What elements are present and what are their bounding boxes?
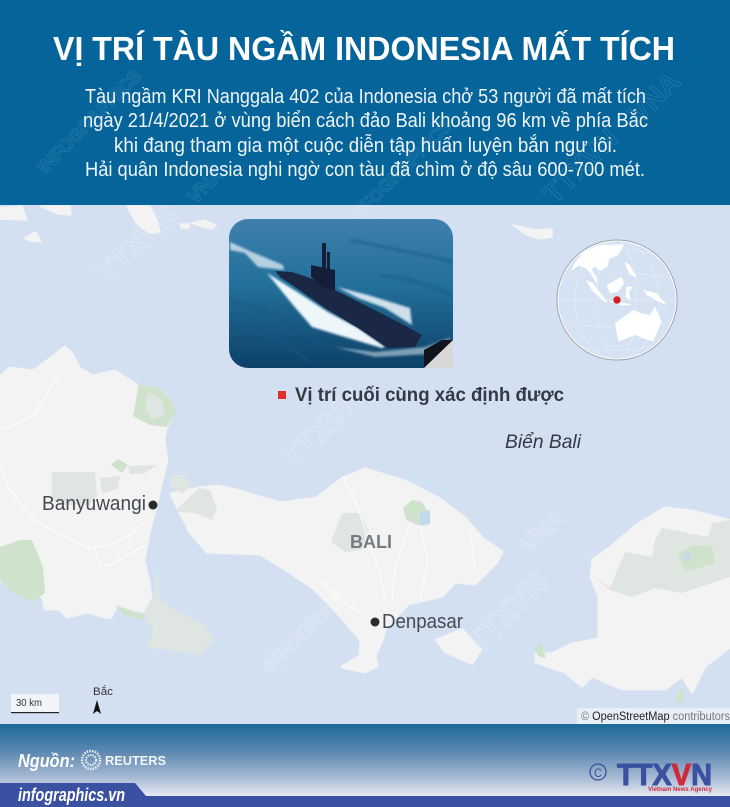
map: Nusa Penida island [436,629,481,664]
landmasses [569,244,667,342]
location dot [613,296,621,304]
map credit: © OpenStreetMap contributors [581,711,730,723]
scale bar [11,694,59,713]
panel: header band [0,0,730,228]
header watermarks: VNA [183,163,228,209]
logo: TTXVN: Vietnam News Agency [648,787,713,793]
logo: TTXVN: TTXVN [617,757,712,792]
source label: Nguồn: [18,751,75,771]
header watermarks [34,66,686,228]
wake [230,242,452,357]
watermarks: VNA [515,504,570,559]
map: Java island with forests [0,347,213,655]
watermarks: TTXVN [462,567,554,660]
intro text: khi đang tham gia một cuộc diễn tập huấn luyện bắn ngư lôi. [114,134,617,157]
label: Bali: BALI [350,532,392,552]
panel: footer [0,724,730,807]
globe locator [557,240,677,360]
intro text: Hải quân Indonesia nghi ngờ con tàu đã chìm ở độ sâu 600-700 mét. [85,159,645,181]
map: Bali island [170,469,502,672]
panel: map background [0,205,730,724]
map: northern small islands [0,206,552,242]
label: Banyuwangi: Banyuwangi [42,493,146,515]
legend: last known position: Vị trí cuối cùng xác định được [295,385,564,406]
map: Lombok island [535,508,730,702]
label: Bali Sea: Biển Bali [505,432,582,453]
header watermarks: TTXVN [537,122,624,209]
page curl [424,340,453,368]
icon: Reuters logo [82,751,166,769]
watermarks: TTXVN [92,197,184,290]
north arrow: Bắc [93,685,114,698]
photo: submarine [229,219,453,368]
scale bar: 30 km [16,698,42,709]
intro text [83,86,648,181]
header watermarks: VNA [622,66,686,129]
watermarks: TTXVN [277,382,369,475]
intro text: ngày 21/4/2021 ở vùng biển cách đảo Bali khoảng 96 km về phía Bắc [83,109,648,132]
website: infographics.vn [18,785,125,805]
north arrow [93,685,114,714]
source tab [0,783,146,796]
header watermarks: INFOGRAPHICS [344,116,455,228]
watermarks: INFOGRAPHICS [258,555,382,679]
title: VỊ TRÍ TÀU NGẦM INDONESIA MẤT TÍCH [53,30,675,67]
header watermarks: INFOGRAPHICS [34,66,145,178]
sail and masts [311,243,335,290]
intro text: Tàu ngầm KRI Nanggala 402 của Indonesia chở 53 người đã mất tích [85,86,646,108]
watermarks [92,197,570,679]
logo: TTXVN: C [594,766,602,780]
graticule [558,241,676,359]
icon: Reuters logo: REUTERS [105,753,166,768]
hull [275,271,422,348]
label: Denpasar: Denpasar [382,611,463,633]
